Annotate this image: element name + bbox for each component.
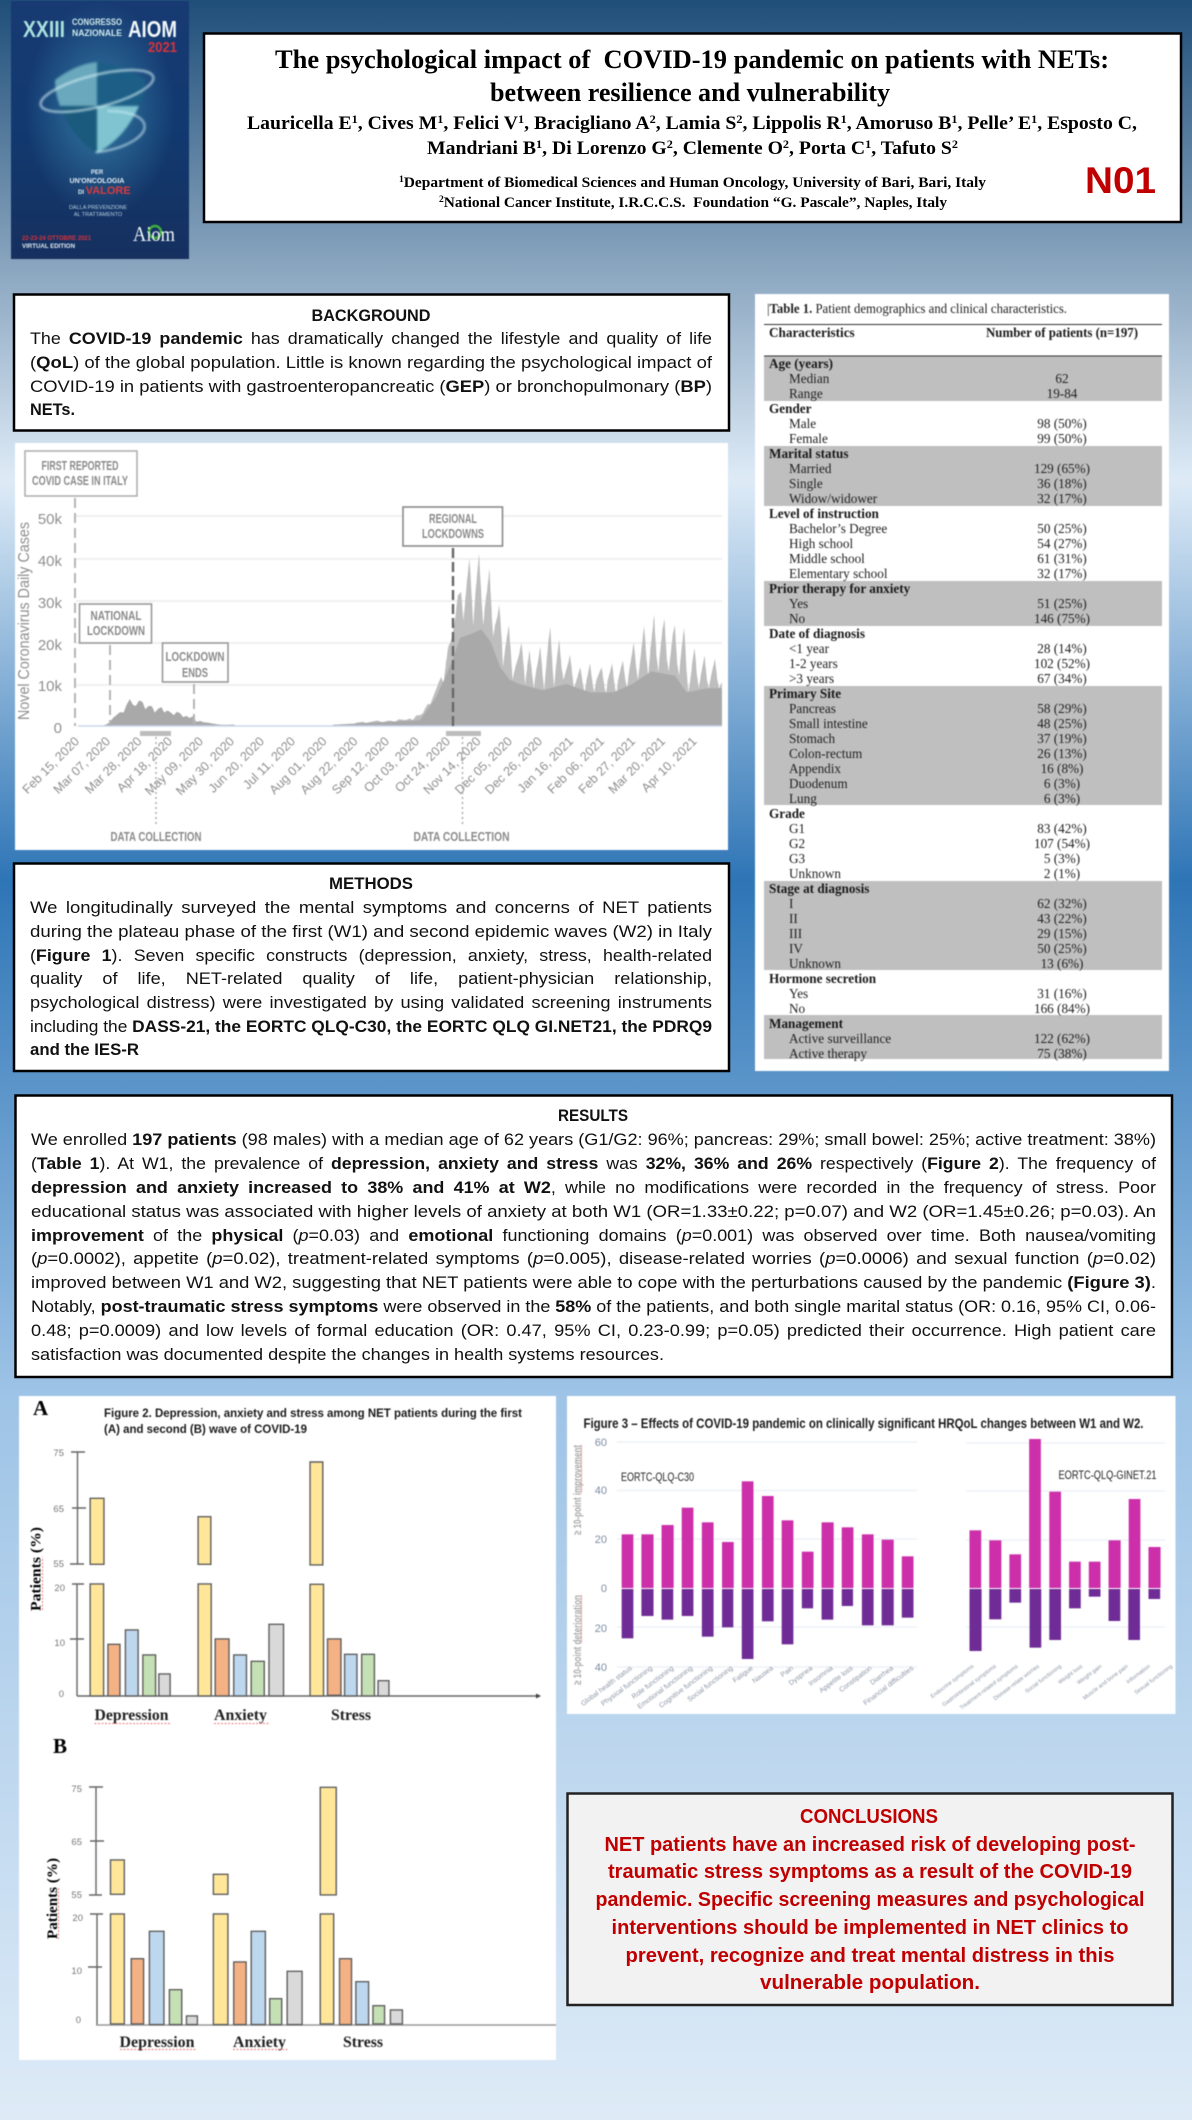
panel: figure 2 depression anxiety stress: [19, 1396, 556, 2060]
date axis labels: Feb 15, 2020: [20, 734, 82, 797]
chart A: first wave: A: [33, 1396, 49, 1420]
authors: , Lamia S: [656, 114, 736, 134]
icon: shield with orbiting rings: [37, 61, 157, 158]
chart A: first wave: 75: [53, 1448, 64, 1459]
table rows: Management: [769, 1016, 844, 1031]
table rows: 62 (32%): [1037, 896, 1087, 911]
table rows: 6 (3%): [1044, 776, 1080, 791]
results text: depression and anxiety increased to 38% and 41% at W2 , while no modifications were recorded in the frequency of stress. Poor: [31, 1178, 1156, 1197]
table rows: No: [789, 611, 806, 626]
table rows: No: [789, 1001, 806, 1016]
authors: 1: [518, 114, 524, 126]
authors: , Lippolis R: [742, 114, 841, 134]
table rows: 31 (16%): [1037, 986, 1087, 1001]
date axis labels: Aug 01, 2020: [267, 734, 330, 797]
table rows: Middle school: [789, 551, 865, 566]
affiliations: National Cancer Institute, I.R.C.C.S. Foundation “G. Pascale”, Naples, Italy: [444, 195, 948, 211]
authors: 1: [1031, 114, 1038, 126]
table header: Number of patients (n=197): [986, 325, 1138, 340]
methods text: We longitudinally surveyed the mental symptoms and concerns of NET patients: [30, 898, 712, 917]
poster heading: XXIII: [23, 16, 65, 42]
title: The psychological impact of COVID-19 pandemic on patients with NETs:: [275, 45, 1109, 74]
C30 category labels: Financial difficulties: [863, 1665, 915, 1707]
date axis labels: Dec 05, 2020: [452, 734, 515, 797]
y axis gridlines and labels: 40k: [38, 553, 62, 570]
table rows: Male: [789, 416, 816, 431]
panel: conclusions: [568, 1794, 1172, 2005]
date axis labels: Mar 20, 2021: [606, 734, 668, 797]
figure 2 title: Figure 2. Depression, anxiety and stress among NET patients during the first: [104, 1406, 522, 1420]
annotation: first reported case: [25, 451, 137, 726]
figure 2 title: [104, 1406, 522, 1436]
table rows: 19-84: [1047, 386, 1078, 401]
date axis labels: Oct 24, 2020: [392, 734, 453, 795]
affiliations: Department of Biomedical Sciences and Human Oncology, University of Bari, Bari, Italy: [404, 175, 987, 191]
GINET21 category labels: Muscle and bone pain: [1082, 1664, 1130, 1702]
table rows: 6 (3%): [1044, 791, 1080, 806]
y axis and gridlines: 0: [601, 1583, 607, 1595]
background text: The COVID-19 pandemic has dramatically changed the lifestyle and quality of life: [30, 329, 712, 348]
GINET21 category labels: Endocrine symptoms: [930, 1664, 975, 1700]
methods text: including the DASS-21, the EORTC QLQ-C30, the EORTC QLQ GI.NET21, the PDRQ9: [30, 1017, 712, 1036]
table rows: Duodenum: [789, 776, 848, 791]
heading: methods: METHODS: [329, 874, 413, 893]
data collection markers: DATA COLLECTION: [414, 829, 510, 844]
authors: Lauricella E: [247, 114, 345, 134]
table rows: [769, 356, 1090, 1061]
C30 category labels: Global health status: [580, 1665, 634, 1708]
heading: conclusions: CONCLUSIONS: [800, 1806, 938, 1828]
congress poster image: 2021: [148, 39, 177, 56]
results text: (p=0.0002), appetite ( p=0.02), treatment-related symptoms ( p=0.005), disease-related worries ( p=0.0006) and sexual function ( p=0.02): [31, 1249, 1156, 1268]
panel: results: [16, 1096, 1172, 1377]
table rows: 50 (25%): [1037, 941, 1087, 956]
chart B: second wave: Anxiety: [233, 2034, 286, 2051]
table rows: 28 (14%): [1037, 641, 1087, 656]
C30 category labels: Appetite loss: [818, 1665, 855, 1695]
methods text: [30, 898, 713, 1059]
table rows: Female: [789, 431, 828, 446]
GINET21 category labels: Treatment-related symptoms: [959, 1664, 1020, 1712]
authors: , Pelle’ E: [958, 114, 1031, 134]
table rows: Range: [789, 386, 823, 401]
congress poster image: DI VALORE: [78, 185, 131, 197]
C30 category labels: Dyspnea: [788, 1665, 814, 1687]
GINET21 category labels: Information: [1126, 1664, 1152, 1685]
table rows: 13 (6%): [1041, 956, 1083, 971]
figure 2 title: (A) and second (B) wave of COVID-19: [104, 1422, 307, 1436]
chart B: second wave: 65: [71, 1837, 82, 1848]
methods text: psychological distress) were investigated by using validated screening instruments: [30, 993, 712, 1012]
date axis labels: [20, 734, 700, 798]
chart B: second wave: Patients (%): [45, 1858, 61, 1939]
table rows: Pancreas: [789, 701, 836, 716]
congress poster image: NAZIONALE: [72, 28, 122, 38]
table rows: Level of instruction: [769, 506, 880, 521]
GINET21 category labels: Weight loss: [1057, 1664, 1084, 1686]
annotation: lockdown ends: LOCKDOWN: [166, 649, 224, 664]
heading: background: BACKGROUND: [312, 306, 430, 325]
results text: (Table 1). At W1, the prevalence of depression, anxiety and stress was 32%, 36% and 26% respectively (Figure 2). The frequency of: [31, 1154, 1156, 1173]
date axis labels: Jan 16, 2021: [515, 734, 576, 796]
y axis gridlines and labels: Novel Coronavirus Daily Cases: [16, 522, 33, 720]
C30 category labels: Physical functioning: [600, 1665, 654, 1708]
table rows: 83 (42%): [1037, 821, 1087, 836]
annotation: national lockdown: LOCKDOWN: [87, 623, 145, 638]
results text: Notably, post-traumatic stress symptoms were observed in the 58% of the patients, and both single marital status (OR: 0.16, 95% CI, 0.06-: [31, 1297, 1156, 1316]
y axis gridlines and labels: [16, 511, 722, 737]
authors: 2: [736, 114, 743, 126]
table rows: Yes: [789, 596, 808, 611]
table rows: 51 (25%): [1037, 596, 1087, 611]
chart B: second wave: B: [53, 1734, 67, 1758]
date axis labels: Jul 11, 2020: [240, 734, 298, 792]
annotation: regional lockdowns: LOCKDOWNS: [422, 526, 484, 541]
y axis and gridlines: 40: [595, 1485, 607, 1497]
congress poster image: DALLA PREVENZIONE: [69, 205, 127, 211]
affiliations: [399, 174, 987, 211]
y axis gridlines and labels: 50k: [38, 511, 62, 528]
table rows: >3 years: [789, 671, 834, 686]
methods text: and the IES-R: [30, 1040, 139, 1059]
table rows: Stage at diagnosis: [769, 881, 869, 896]
annotation: regional lockdowns: [403, 507, 502, 726]
authors: , Clemente O: [673, 139, 783, 159]
date axis labels: Apr 18, 2020: [114, 734, 175, 795]
table rows: G3: [789, 851, 806, 866]
table rows: Active therapy: [789, 1046, 867, 1061]
table rows: Yes: [789, 986, 808, 1001]
table rows: 146 (75%): [1034, 611, 1090, 626]
congress poster image: AL TRATTAMENTO: [74, 212, 123, 218]
chart B: second wave: 10: [71, 1966, 82, 1977]
annotation: first reported case: COVID CASE IN ITALY: [32, 473, 128, 488]
results text: [31, 1130, 1156, 1364]
chart B: second wave: Stress: [343, 2034, 383, 2051]
congress poster image: PER: [91, 170, 104, 176]
table rows: Grade: [769, 806, 805, 821]
results text: We enrolled 197 patients (98 males) with a median age of 62 years (G1/G2: 96%; pancreas: 29%; small bowel: 25%; active treatment: 38%): [31, 1130, 1156, 1149]
authors: , Tafuto S: [871, 139, 952, 159]
authors: [247, 114, 1137, 159]
C30 category labels: Constipation: [838, 1665, 874, 1694]
date axis labels: Nov 14, 2020: [421, 734, 484, 797]
table rows: 36 (18%): [1037, 476, 1087, 491]
authors: , Porta C: [789, 139, 865, 159]
table rows: 54 (27%): [1037, 536, 1087, 551]
table rows: 98 (50%): [1037, 416, 1087, 431]
table rows: 37 (19%): [1037, 731, 1087, 746]
annotation: national lockdown: [80, 604, 152, 726]
y axis and gridlines: ≥ 10-point improvement: [572, 1445, 584, 1535]
date axis labels: Apr 10, 2021: [639, 734, 700, 795]
table rows: 166 (84%): [1034, 1001, 1090, 1016]
results text: satisfaction was documented despite the changes in health systems resources.: [31, 1345, 664, 1364]
y axis and gridlines: 40: [595, 1662, 607, 1674]
heading: results: RESULTS: [558, 1106, 628, 1125]
table rows: 50 (25%): [1037, 521, 1087, 536]
panel: methods: [14, 864, 729, 1071]
table rows: Bachelor’s Degree: [789, 521, 887, 536]
table rows: Date of diagnosis: [769, 626, 865, 641]
table rows: Colon-rectum: [789, 746, 863, 761]
date axis labels: Mar 07, 2020: [51, 734, 113, 797]
table rows: 32 (17%): [1037, 491, 1087, 506]
date axis labels: Feb 06, 2021: [545, 734, 607, 797]
table rows: 75 (38%): [1037, 1046, 1087, 1061]
authors: 1: [536, 139, 542, 151]
date axis labels: Jun 20, 2020: [206, 734, 267, 796]
methods text: (Figure 1). Seven specific constructs (depression, anxiety, stress, health-related: [30, 946, 712, 965]
table rows: Median: [789, 371, 830, 386]
data collection markers: DATA COLLECTION: [110, 829, 202, 844]
congress poster image: UN'ONCOLOGIA: [70, 178, 124, 185]
authors: 1: [841, 114, 847, 126]
EORTC-QLQ-C30 bars: [622, 1481, 913, 1659]
GINET21 category labels: Weight gain: [1076, 1664, 1103, 1686]
C30 category labels: Insomnia: [808, 1665, 835, 1688]
authors: , Bracigliano A: [524, 114, 650, 134]
authors: 1: [437, 114, 444, 126]
C30 category labels: Pain: [780, 1665, 795, 1679]
table rows: Primary Site: [769, 686, 841, 701]
table rows: Prior therapy for anxiety: [769, 581, 911, 596]
title: between resilience and vulnerability: [490, 78, 890, 107]
date axis labels: Aug 22, 2020: [298, 734, 361, 797]
C30 category labels: Emotional functioning: [637, 1665, 694, 1711]
table rows: III: [789, 926, 802, 941]
conclusions text: vulnerable population.: [760, 1972, 980, 1994]
instrument labels: EORTC-QLQ-GINET.21: [1058, 1470, 1156, 1482]
conclusions text: traumatic stress symptoms as a result of the COVID-19: [608, 1861, 1132, 1883]
authors: 2: [952, 139, 958, 151]
GINET21 category labels: Social functioning: [1024, 1664, 1063, 1695]
congress poster image: 22-23-24 OTTOBRE 2021: [22, 235, 92, 242]
table rows: I: [789, 896, 793, 911]
chart A: first wave: 10: [54, 1638, 65, 1649]
date axis labels: Oct 03, 2020: [361, 734, 422, 795]
y axis and gridlines: [572, 1437, 1165, 1685]
table rows: Gender: [769, 401, 812, 416]
GINET21 category labels: Sexual functioning: [1134, 1664, 1174, 1696]
annotation: lockdown ends: [162, 643, 228, 726]
background text: [30, 329, 712, 419]
conclusions text: NET patients have an increased risk of developing post-: [604, 1834, 1136, 1856]
table rows: 102 (52%): [1034, 656, 1090, 671]
methods text: during the plateau phase of the first (W1) and second epidemic waves (W2) in Italy: [30, 922, 713, 941]
title panel: [204, 34, 1181, 222]
table rows: Hormone secretion: [769, 971, 877, 986]
table rows: 2 (1%): [1044, 866, 1080, 881]
table rows: Marital status: [769, 446, 848, 461]
poster code: N01: [1085, 160, 1156, 201]
date axis labels: Sep 12, 2020: [329, 734, 392, 797]
y axis and gridlines: 60: [595, 1437, 607, 1449]
table rows: High school: [789, 536, 853, 551]
authors: 1: [865, 139, 872, 151]
y axis gridlines and labels: 30k: [38, 595, 62, 612]
table rows: G1: [789, 821, 805, 836]
panel: figure 1 daily cases chart: [15, 443, 728, 850]
GINET21 category labels: [930, 1664, 1174, 1712]
table rows: 107 (54%): [1034, 836, 1090, 851]
congress poster image: VIRTUAL EDITION: [22, 243, 75, 250]
icon: AIOM logo: Aiom: [133, 222, 175, 246]
panel: background: [14, 294, 729, 430]
y axis and gridlines: 20: [595, 1623, 607, 1635]
table header: [764, 324, 1162, 356]
annotation: national lockdown: NATIONAL: [90, 608, 142, 623]
background text: NETs.: [30, 400, 75, 419]
table rows: 5 (3%): [1044, 851, 1080, 866]
table rows: Small intestine: [789, 716, 868, 731]
congress poster image: AIOM: [128, 16, 177, 42]
instrument labels: EORTC-QLQ-C30: [621, 1472, 694, 1484]
table shaded bands: [764, 356, 1162, 1059]
results text: 0.48; p=0.0009) and low levels of formal education (OR: 0.47, 95% CI, 0.23-0.99; p=0.05) predicted their occurrence. High patient care: [31, 1321, 1156, 1340]
table rows: 43 (22%): [1037, 911, 1087, 926]
background text: (QoL) of the global population. Little is known regarding the psychological impact of: [30, 353, 712, 372]
chart B: second wave: Depression: [120, 2034, 195, 2051]
table rows: G2: [789, 836, 805, 851]
authors: , Esposto C,: [1037, 114, 1137, 134]
chart A: first wave: Stress: [331, 1707, 371, 1724]
authors: , Di Lorenzo G: [542, 139, 667, 159]
table rows: 16 (8%): [1041, 761, 1083, 776]
y axis gridlines and labels: 0: [54, 720, 62, 737]
table rows: 48 (25%): [1037, 716, 1087, 731]
y axis gridlines and labels: 10k: [38, 678, 62, 695]
C30 category labels: [580, 1665, 915, 1711]
panel: table 1 patient characteristics: [755, 294, 1169, 1071]
methods text: quality of life, NET-related quality of life, patient-physician relationship,: [30, 969, 712, 988]
chart A: first wave: Patients (%): [28, 1527, 44, 1611]
chart B: second wave: 55: [71, 1890, 82, 1901]
table rows: Appendix: [789, 761, 841, 776]
congress poster image: [11, 1, 189, 259]
y axis gridlines and labels: 20k: [38, 637, 62, 654]
annotation: lockdown ends: ENDS: [182, 665, 208, 680]
table rows: 99 (50%): [1037, 431, 1087, 446]
authors: 2: [667, 139, 673, 151]
title: [275, 45, 1109, 107]
y axis and gridlines: 20: [595, 1534, 607, 1546]
table rows: Widow/widower: [789, 491, 878, 506]
chart A: first wave: 20: [54, 1583, 65, 1594]
C30 category labels: Cognitive functioning: [658, 1665, 714, 1710]
chart B: second wave: 75: [71, 1784, 82, 1795]
affiliations: 1: [399, 174, 404, 184]
table rows: Unknown: [789, 956, 841, 971]
instrument labels: [621, 1470, 1156, 1484]
table rows: Stomach: [789, 731, 836, 746]
C30 category labels: Diarrhea: [869, 1665, 895, 1687]
table rows: 122 (62%): [1034, 1031, 1090, 1046]
chart A: first wave: Anxiety: [214, 1707, 267, 1724]
authors: , Felici V: [443, 114, 519, 134]
table rows: Elementary school: [789, 566, 888, 581]
chart B: second wave: [45, 1734, 556, 2051]
y axis and gridlines: ≥ 10-point deterioration: [572, 1595, 584, 1685]
date axis labels: Mar 28, 2020: [82, 734, 145, 797]
table rows: Single: [789, 476, 823, 491]
table rows: 129 (65%): [1034, 461, 1090, 476]
results text: educational status was associated with higher levels of anxiety at both W1 (OR=1.33±0.22; p=0.07) and W2 (OR=1.45±0.26; p=0.03). An: [31, 1202, 1156, 1221]
table rows: 67 (34%): [1037, 671, 1087, 686]
chart A: first wave: 0: [59, 1689, 64, 1700]
C30 category labels: Role functioning: [631, 1665, 675, 1701]
authors: , Cives M: [358, 114, 437, 134]
conclusions text: prevent, recognize and treat mental distress in this: [626, 1945, 1114, 1967]
date axis labels: May 09, 2020: [142, 734, 206, 798]
background text: COVID-19 in patients with gastroenteropancreatic ( GEP) or bronchopulmonary ( BP): [30, 377, 712, 396]
C30 category labels: Fatigue: [732, 1665, 755, 1685]
table rows: 32 (17%): [1037, 566, 1087, 581]
date axis labels: May 30, 2020: [173, 734, 237, 798]
table rows: 62: [1055, 371, 1069, 386]
table rows: 29 (15%): [1037, 926, 1087, 941]
date axis labels: Dec 26, 2020: [482, 734, 545, 797]
conclusions text: [596, 1834, 1144, 1994]
EORTC-QLQ-GINET21 bars: [970, 1439, 1161, 1651]
date axis labels: Feb 27, 2021: [576, 734, 638, 797]
results text: improved between W1 and W2, suggesting that NET patients were able to cope with the perturbations caused by the pandemic (Figure 3) .: [31, 1273, 1156, 1292]
GINET21 category labels: Gastrointestinal symptoms: [941, 1664, 998, 1708]
daily cases bars: [78, 554, 722, 726]
chart B: second wave: 0: [76, 2015, 81, 2026]
table rows: Unknown: [789, 866, 841, 881]
table rows: <1 year: [789, 641, 830, 656]
table rows: 1-2 years: [789, 656, 838, 671]
C30 category labels: Social functioning: [686, 1665, 735, 1704]
chart A: first wave: [28, 1396, 541, 1724]
annotation: regional lockdowns: REGIONAL: [429, 511, 477, 526]
chart A: first wave: Depression: [94, 1707, 169, 1724]
data collection markers: [110, 731, 510, 844]
chart A: first wave: 65: [53, 1504, 64, 1515]
table rows: IV: [789, 941, 803, 956]
table header: Characteristics: [769, 325, 855, 340]
table rows: 61 (31%): [1037, 551, 1087, 566]
congress poster image: CONGRESSO: [72, 17, 122, 27]
table rows: Age (years): [769, 356, 833, 371]
panel: figure 3 HRQoL changes: [567, 1396, 1176, 1714]
results text: improvement of the physical (p=0.03) and emotional functioning domains ( p=0.001) was observed over time. Both nausea/vomiting: [31, 1226, 1156, 1245]
C30 category labels: Nausea: [751, 1665, 775, 1685]
table rows: 58 (29%): [1037, 701, 1087, 716]
GINET21 category labels: Disease-relate worries: [993, 1664, 1041, 1702]
authors: 1: [951, 114, 958, 126]
conclusions text: interventions should be implemented in NET clinics to: [612, 1917, 1128, 1939]
chart A: first wave: 55: [53, 1559, 64, 1570]
table rows: Active surveillance: [789, 1031, 891, 1046]
annotation: first reported case: FIRST REPORTED: [42, 458, 118, 473]
affiliations: 2: [439, 194, 444, 204]
authors: 2: [650, 114, 656, 126]
table rows: Married: [789, 461, 832, 476]
table rows: Lung: [789, 791, 817, 806]
conclusions text: pandemic. Specific screening measures and psychological: [596, 1889, 1144, 1911]
authors: 1: [352, 114, 358, 126]
table title: |Table 1. Patient demographics and clinical characteristics.: [767, 301, 1067, 316]
authors: 2: [783, 139, 789, 151]
table rows: 26 (13%): [1037, 746, 1087, 761]
authors: Mandriani B: [427, 139, 529, 159]
authors: , Amoruso B: [847, 114, 951, 134]
table rows: II: [789, 911, 798, 926]
chart B: second wave: 20: [72, 1913, 83, 1924]
